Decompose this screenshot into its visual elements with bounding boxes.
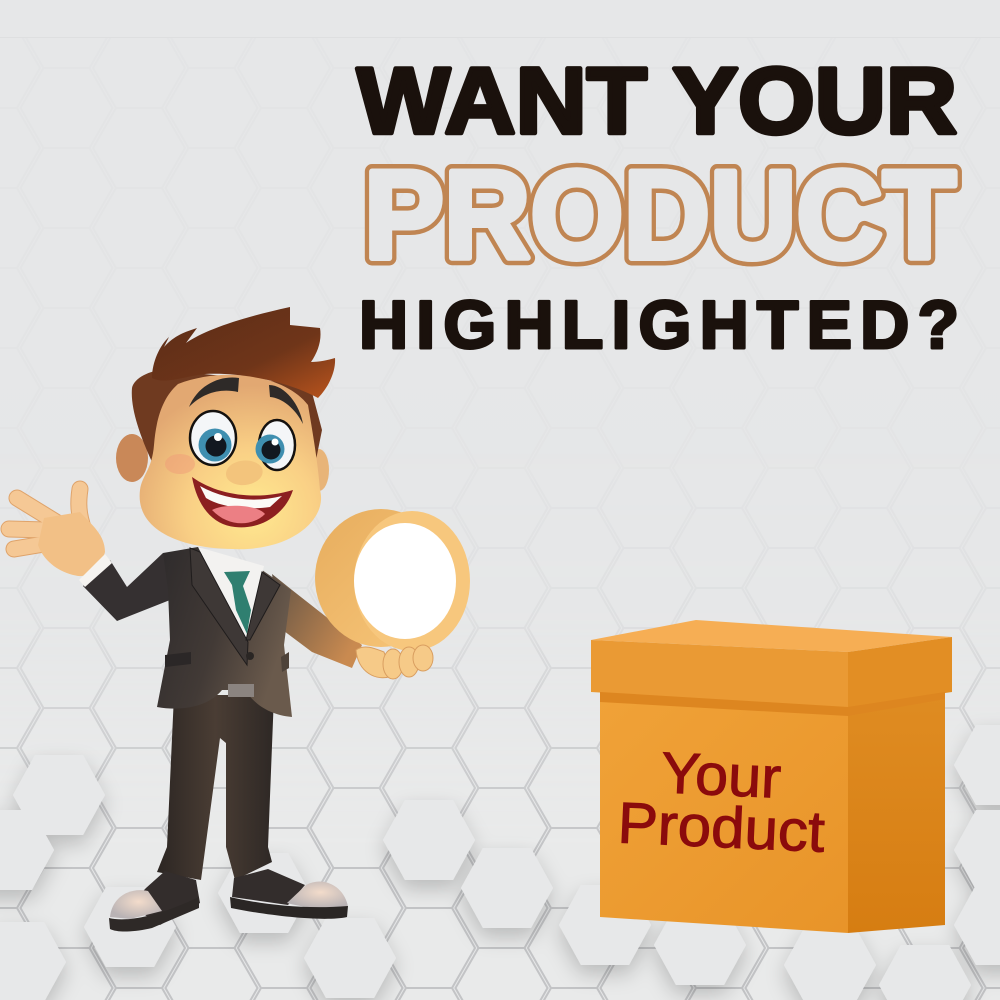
lamp [315,509,470,651]
necktie [224,571,251,634]
box label: Your [660,740,783,811]
title: highlighted: HIGHLIGHTED? [359,287,959,363]
title: product outlined: PRODUCT [364,146,956,285]
raised hexagon tiles [0,725,1000,1000]
shirt cuff [79,554,112,587]
jacket button and pockets [165,652,289,672]
hand waving [9,489,105,576]
trousers [157,695,274,880]
left sleeve [83,553,185,621]
background panel [0,626,1000,1000]
title: want your: WANT YOUR [357,48,957,153]
lapels [190,548,280,665]
cheek blush [165,454,195,474]
jacket [157,547,292,717]
shirt [198,547,264,642]
eyes [190,411,295,470]
box label [616,738,828,865]
box lid [591,620,952,652]
hair back [132,370,322,475]
hand holding lamp [356,645,433,679]
eyebrows [189,377,239,407]
belt [228,684,254,697]
product box [591,620,952,933]
box label: Product [616,790,826,865]
face [140,375,321,549]
character: cartoon businessman [9,307,470,932]
box body [600,692,848,933]
mouth [192,477,293,527]
ears [116,434,329,491]
title: product outlined: PRODUCT [364,146,956,285]
nose [226,460,263,485]
right sleeve [272,574,362,668]
right shoe [230,869,348,919]
hair top [152,307,335,398]
left shoe [109,871,200,932]
